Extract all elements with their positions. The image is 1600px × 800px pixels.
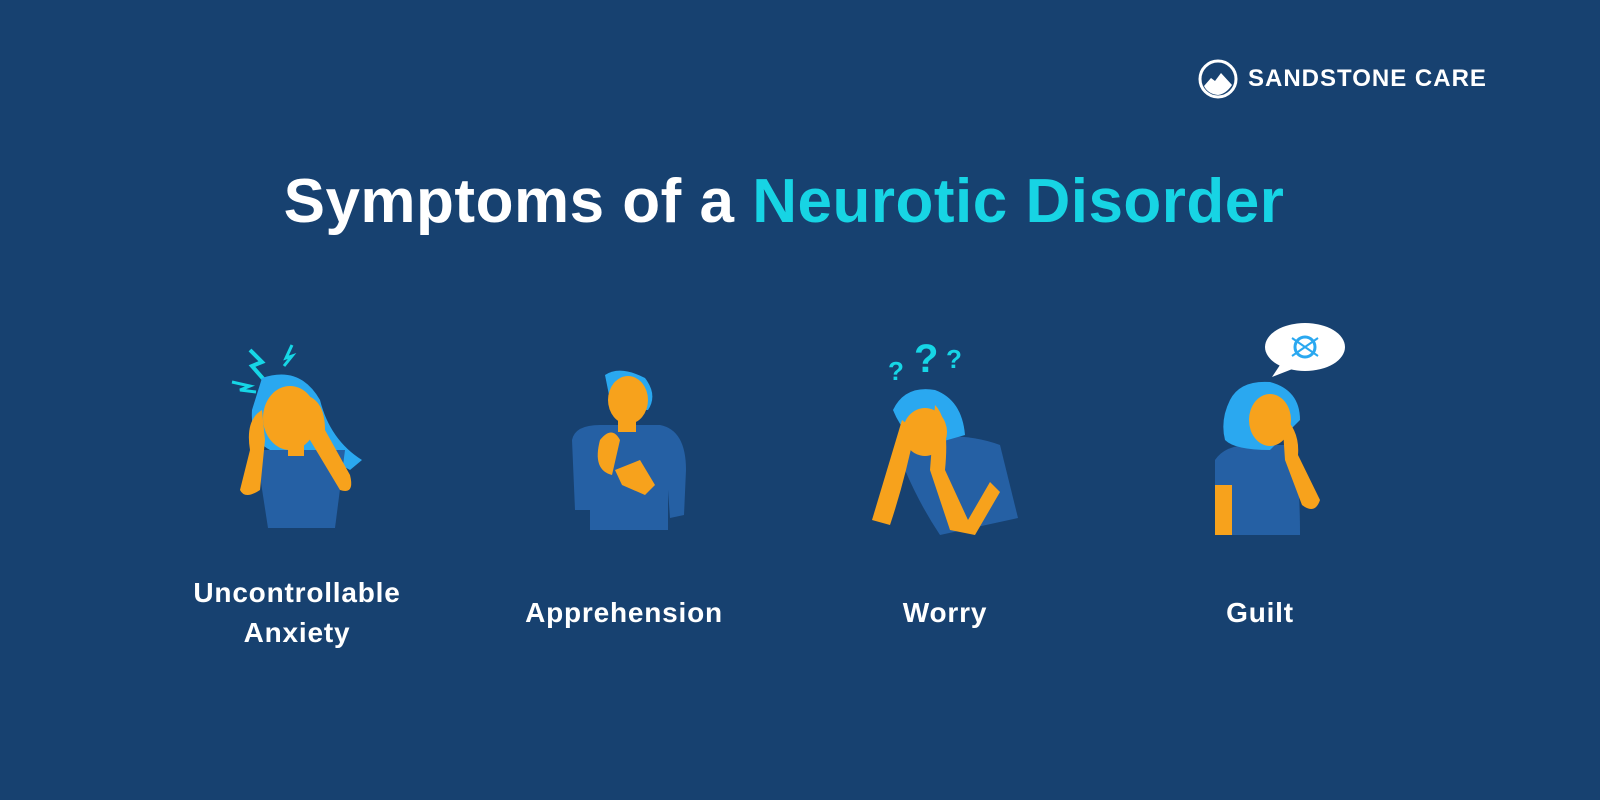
label: uncontrollable anxiety: Uncontrollable (193, 577, 401, 608)
figure: uncontrollable anxiety (232, 345, 362, 528)
label: apprehension: Apprehension (525, 597, 723, 628)
logo (1198, 60, 1487, 98)
label: worry: Worry (903, 597, 987, 628)
label: uncontrollable anxiety (193, 577, 401, 648)
label: guilt: Guilt (1226, 597, 1294, 628)
figure: worry: ? (888, 356, 904, 386)
figure: guilt (1215, 323, 1345, 535)
figure: apprehension (572, 371, 686, 530)
label: uncontrollable anxiety: Anxiety (244, 617, 350, 648)
title: Symptoms of a Neurotic Disorder (284, 167, 1284, 236)
figure: worry: ? (946, 344, 962, 374)
figure: worry: ? (914, 337, 938, 381)
figure: worry (872, 337, 1018, 535)
logo: SANDSTONE CARE (1248, 65, 1487, 92)
